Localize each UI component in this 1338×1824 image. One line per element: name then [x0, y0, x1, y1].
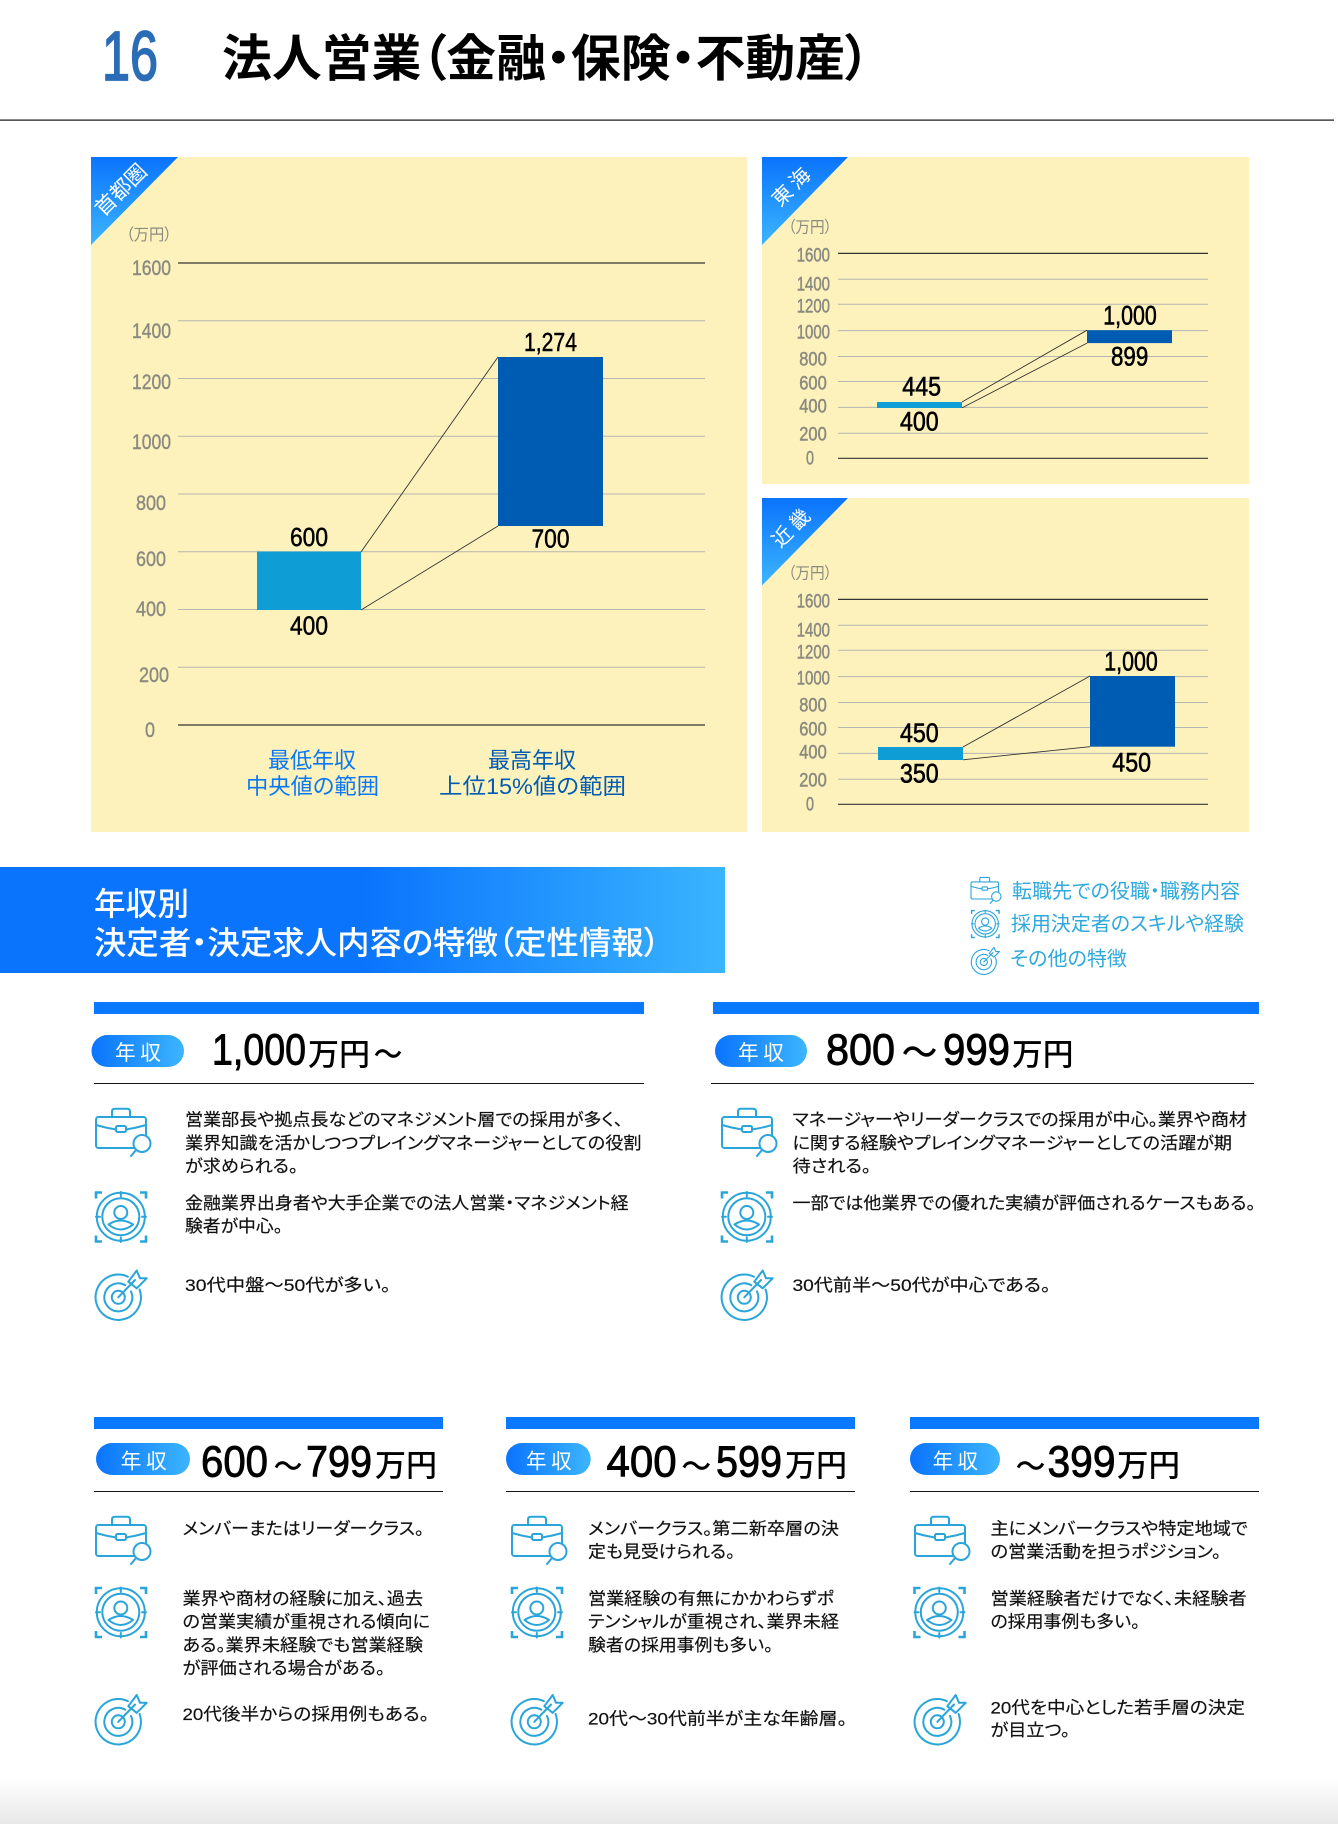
skills text	[182, 1590, 430, 1678]
card: 〜399万円	[910, 1417, 1259, 1744]
other text: 20代後半からの採用例もある。	[182, 1705, 429, 1724]
grid and axis labels: 600	[799, 374, 827, 395]
bar value labels: 350	[900, 758, 939, 788]
bar value labels: 1,000	[1103, 300, 1157, 330]
grid and axis labels: 1600	[797, 592, 830, 613]
grid and axis labels: 600	[799, 720, 827, 740]
grid and axis labels: 1400	[797, 620, 830, 641]
salary range heading: 600	[201, 1438, 268, 1486]
salary range heading: 399	[1048, 1438, 1116, 1486]
role text	[185, 1110, 642, 1176]
card: 800〜999万円	[711, 1002, 1259, 1320]
icon: briefcase	[512, 1517, 566, 1564]
role text: が求められる。	[185, 1157, 298, 1176]
section number: 16	[102, 17, 158, 95]
role text: 主にメンバークラスや特定地域で	[990, 1520, 1248, 1538]
skills text: テンシャルが重視され、業界未経	[588, 1613, 839, 1632]
category label: highest: 上位15%値の範囲	[439, 774, 626, 799]
grid and axis labels: 800	[799, 350, 827, 370]
panel: 東海 chart	[762, 157, 1249, 484]
icon: briefcase	[96, 1109, 150, 1156]
icon: person target	[96, 1588, 146, 1638]
bar: lowest salary	[878, 747, 963, 760]
card: 400〜599万円	[506, 1417, 855, 1744]
section banner: 年収別	[94, 879, 189, 925]
bar: lowest salary	[877, 402, 962, 408]
role text: メンバーまたはリーダークラス。	[182, 1520, 424, 1538]
bar value labels: 1,274	[524, 327, 577, 357]
unit label: （万円）	[126, 226, 172, 244]
icon: target arrow	[722, 1270, 773, 1320]
role text: に関する経験やプレイングマネージャーとしての活躍が期	[792, 1134, 1232, 1153]
salary pill	[96, 1443, 190, 1476]
connector lines	[361, 357, 498, 610]
bar value labels	[900, 300, 1157, 436]
legend item: role: 転職先での役職・職務内容	[1012, 880, 1240, 903]
region tag: 東海	[762, 157, 848, 245]
salary pill: 年 収	[526, 1446, 572, 1476]
bar value labels: 700	[532, 524, 570, 554]
role text: 待される。	[792, 1157, 871, 1176]
grid and axis labels: 200	[139, 664, 169, 687]
bar value labels	[290, 327, 577, 640]
grid and axis labels: 800	[799, 695, 827, 716]
category label: highest: 最高年収	[488, 743, 576, 775]
icon: target arrow	[512, 1695, 563, 1744]
legend item: other	[971, 947, 1127, 974]
skills text: が評価される場合がある。	[182, 1659, 385, 1678]
bar: highest salary	[1090, 676, 1175, 747]
salary range heading: ～	[902, 1024, 937, 1076]
salary range heading: 800	[826, 1026, 895, 1074]
salary range heading: 万円	[1117, 1440, 1180, 1486]
bar value labels	[900, 646, 1158, 788]
salary pill: 年 収	[115, 1037, 161, 1067]
grid and axis labels: 1200	[132, 371, 171, 394]
icon: target arrow	[96, 1695, 147, 1744]
salary range heading: 999	[943, 1026, 1010, 1074]
grid and axis labels: 1600	[132, 257, 171, 280]
grid and axis labels	[132, 257, 705, 742]
salary range heading	[826, 1024, 1074, 1076]
skills text	[990, 1590, 1247, 1632]
skills text: 金融業界出身者や大手企業での法人営業・マネジメント経	[185, 1194, 629, 1213]
salary range heading	[212, 1026, 402, 1074]
bar value labels: 450	[900, 718, 939, 748]
icon: briefcase	[722, 1109, 776, 1156]
role text	[588, 1520, 839, 1562]
salary range heading: 万円	[1012, 1030, 1074, 1074]
grid and axis labels: 1000	[797, 323, 830, 344]
icon: person target	[914, 1588, 964, 1638]
other text	[990, 1698, 1245, 1740]
role text	[792, 1110, 1247, 1176]
salary pill: 年 収	[738, 1037, 784, 1067]
grid and axis labels: 400	[136, 598, 166, 621]
other text: 20代を中心とした若手層の決定	[990, 1698, 1245, 1717]
salary pill	[92, 1035, 184, 1067]
header	[0, 17, 1334, 121]
skills text: 一部では他業界での優れた実績が評価されるケースもある。	[792, 1194, 1256, 1213]
salary range heading: 万円	[308, 1030, 370, 1074]
section banner: 決定者・決定求人内容の特徴（定性情報）	[94, 918, 660, 964]
role text: 業界知識を活かしつつプレイングマネージャーとしての役割	[185, 1134, 642, 1153]
connector lines	[962, 330, 1087, 408]
salary range heading	[606, 1438, 847, 1486]
role text	[990, 1520, 1248, 1562]
salary pill	[715, 1035, 807, 1067]
unit label: （万円）	[788, 564, 832, 582]
grid and axis labels: 1400	[797, 274, 830, 295]
salary range heading	[201, 1438, 437, 1486]
icon: briefcase	[915, 1517, 970, 1564]
grid and axis labels: 200	[799, 424, 827, 446]
other text: が目立つ。	[990, 1721, 1070, 1740]
bar value labels: 445	[902, 372, 941, 402]
skills text: の営業実績が重視される傾向に	[182, 1613, 430, 1632]
legend item: other: その他の特徴	[1010, 948, 1127, 971]
grid and axis labels: 400	[799, 742, 827, 763]
skills text: 業界や商材の経験に加え、過去	[182, 1590, 423, 1608]
salary range heading: ～	[1016, 1442, 1045, 1486]
skills text: 営業経験者だけでなく、未経験者	[990, 1590, 1247, 1608]
icon: person target	[96, 1192, 146, 1242]
bar: highest salary	[498, 357, 603, 526]
region tag: 首都圏: 首都圏	[87, 156, 153, 222]
unit label: （万円）	[788, 218, 832, 236]
legend	[971, 877, 1244, 974]
role text: マネージャーやリーダークラスでの採用が中心。業界や商材	[792, 1110, 1247, 1130]
skills text: ある。業界未経験でも営業経験	[182, 1636, 423, 1655]
salary range heading: 万円	[785, 1440, 847, 1486]
salary range heading: ～	[374, 1030, 402, 1074]
bar: lowest salary	[257, 552, 361, 610]
salary range heading: 599	[716, 1438, 782, 1486]
panel: 首都圏 chart	[87, 156, 747, 832]
grid and axis labels: 0	[145, 719, 155, 742]
icon: target arrow	[915, 1695, 966, 1744]
region tag: 近畿	[762, 498, 848, 586]
bar value labels: 400	[900, 406, 939, 436]
other text: 30代前半～50代が中心である。	[792, 1276, 1050, 1295]
region tag: 近畿: 近 畿	[764, 501, 816, 553]
grid and axis labels: 1000	[797, 669, 830, 690]
connector lines	[963, 676, 1090, 760]
grid and axis labels: 1600	[797, 246, 830, 267]
skills text	[588, 1590, 839, 1655]
salary range heading: 799	[306, 1438, 372, 1486]
grid and axis labels: 1200	[797, 643, 830, 664]
grid and axis labels: 800	[136, 492, 166, 515]
region tag: 東海: 東 海	[764, 160, 816, 212]
card: 600〜799万円	[94, 1417, 443, 1744]
bar value labels: 600	[290, 522, 328, 552]
category label: lowest: 最低年収	[268, 743, 356, 775]
title: 法人営業（金融・保険・不動産）	[222, 19, 870, 91]
skills text: 験者の採用事例も多い。	[588, 1636, 773, 1655]
grid and axis labels: 200	[799, 770, 827, 791]
role text: メンバークラス。第二新卒層の決	[588, 1520, 839, 1538]
category label: highest	[439, 743, 626, 799]
salary pill: 年 収	[933, 1446, 978, 1476]
salary pill: 年 収	[121, 1446, 167, 1476]
role text: 営業部長や拠点長などのマネジメント層での採用が多く、	[185, 1110, 623, 1130]
skills text: 験者が中心。	[185, 1217, 283, 1236]
skills text: の採用事例も多い。	[990, 1613, 1140, 1632]
grid and axis labels: 1000	[132, 431, 171, 454]
salary range heading: 400	[606, 1438, 677, 1486]
legend item: skills	[972, 910, 1244, 938]
grid and axis labels	[797, 592, 1208, 816]
bar value labels: 450	[1112, 748, 1151, 778]
panel: 近畿 chart	[762, 498, 1249, 832]
salary range heading: 万円	[375, 1440, 437, 1486]
grid and axis labels: 1200	[797, 297, 830, 318]
category label: lowest: 中央値の範囲	[246, 769, 379, 801]
role text: の営業活動を担うポジション。	[990, 1543, 1221, 1562]
other text: 20代～30代前半が主な年齢層。	[588, 1710, 847, 1728]
skills text	[185, 1194, 629, 1236]
icon: person target	[512, 1588, 562, 1638]
salary pill	[910, 1443, 1000, 1476]
grid and axis labels: 1400	[132, 320, 171, 343]
icon: person target	[722, 1192, 772, 1242]
bar: highest salary	[1087, 330, 1172, 343]
grid and axis labels: 400	[799, 397, 827, 418]
bar value labels: 400	[290, 610, 328, 640]
salary range heading	[1016, 1438, 1180, 1486]
section banner	[0, 867, 725, 973]
grid and axis labels	[797, 246, 1208, 470]
bar value labels: 1,000	[1104, 646, 1158, 676]
region tag: 首都圏	[87, 156, 178, 245]
grid and axis labels: 0	[806, 449, 814, 470]
skills text: 営業経験の有無にかかわらずポ	[588, 1590, 834, 1608]
grid and axis labels: 600	[136, 548, 166, 571]
role text: 定も見受けられる。	[588, 1543, 735, 1562]
bar value labels: 899	[1111, 342, 1148, 372]
card: 1,000万円〜	[92, 1002, 644, 1320]
salary range heading: ～	[274, 1442, 302, 1486]
salary range heading: 1,000	[212, 1026, 306, 1074]
other text: 30代中盤～50代が多い。	[185, 1276, 391, 1295]
salary pill	[506, 1443, 591, 1476]
category label: lowest	[246, 743, 379, 801]
salary range heading: ～	[682, 1442, 711, 1486]
icon: target arrow	[96, 1270, 147, 1320]
grid and axis labels: 0	[806, 794, 814, 816]
icon: briefcase	[96, 1517, 150, 1564]
legend item: skills: 採用決定者のスキルや経験	[1011, 912, 1244, 936]
